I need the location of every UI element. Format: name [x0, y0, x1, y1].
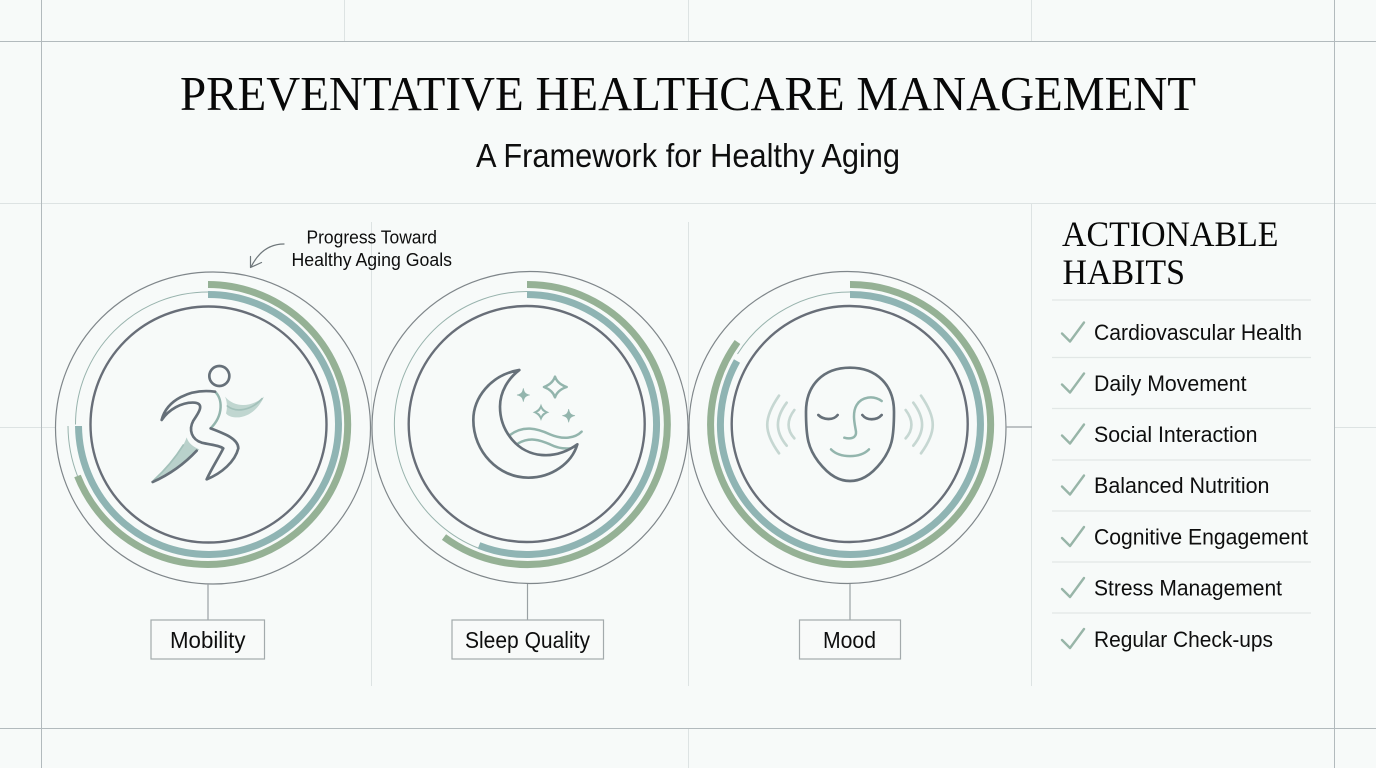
mood progress rings	[711, 284, 991, 564]
mood label	[800, 620, 900, 659]
mobility label: Mobility	[170, 627, 246, 653]
mood outer circle	[689, 272, 1006, 584]
icon: running figure	[152, 366, 264, 482]
mobility connector	[207, 584, 209, 620]
habit: balanced nutrition: Balanced Nutrition	[1094, 473, 1270, 498]
icon: moon and stars	[473, 370, 582, 478]
connector to habits	[1006, 426, 1032, 428]
panel: mood	[689, 272, 1032, 659]
habit: stress management: Stress Management	[1094, 576, 1282, 600]
habit: cardiovascular health: Cardiovascular Health	[1094, 320, 1302, 345]
callout: progress toward healthy aging goals: Progress Toward	[306, 228, 437, 248]
sleep inner circle	[409, 306, 645, 542]
habit: daily movement: Daily Movement	[1094, 371, 1246, 396]
callout: progress toward healthy aging goals	[250, 228, 452, 270]
mood inner circle	[732, 306, 968, 542]
habit: cognitive engagement: Cognitive Engagement	[1094, 524, 1308, 550]
icon: calm face	[767, 368, 933, 481]
habits heading: HABITS	[1062, 252, 1185, 292]
panel: actionable habits	[1052, 214, 1311, 652]
panel: mobility	[56, 272, 370, 659]
habit: social interaction: Social Interaction	[1094, 422, 1258, 447]
mood connector	[849, 584, 851, 620]
habits heading	[1062, 214, 1278, 292]
mobility outer circle	[56, 272, 370, 584]
habits heading: ACTIONABLE	[1062, 214, 1278, 254]
mobility inner circle	[90, 306, 326, 542]
panel: sleep quality	[372, 272, 688, 659]
habit: regular check-ups: Regular Check-ups	[1094, 627, 1273, 652]
mobility progress rings	[68, 284, 348, 564]
sleep outer circle	[372, 272, 688, 584]
sleep progress rings	[394, 284, 667, 564]
sleep quality label: Sleep Quality	[465, 627, 590, 653]
mood label: Mood	[823, 627, 876, 653]
title: PREVENTATIVE HEALTHCARE MANAGEMENT	[180, 66, 1196, 121]
subtitle: A Framework for Healthy Aging	[476, 137, 900, 174]
callout: progress toward healthy aging goals: Healthy Aging Goals	[292, 250, 452, 270]
sleep quality label	[452, 620, 604, 659]
mobility label	[151, 620, 264, 659]
sleep connector	[526, 584, 528, 620]
